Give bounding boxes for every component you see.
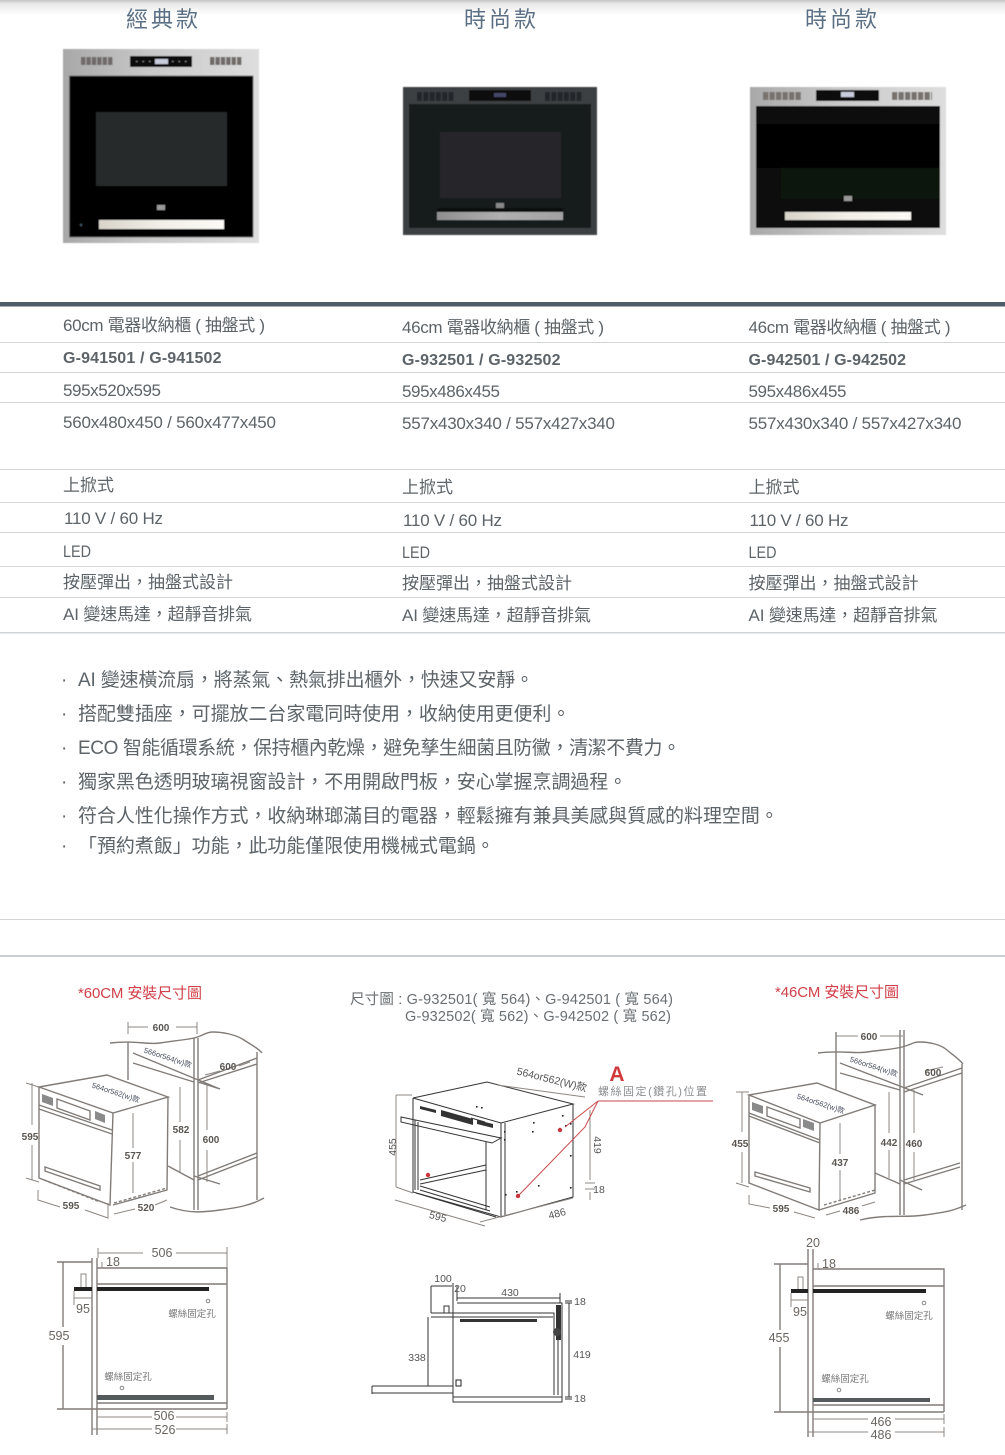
dimension labels: 486 <box>871 1428 891 1442</box>
spec table column: 60cm classic: AI 變速馬達，超靜音排氣 <box>63 605 252 624</box>
dimension labels: 577 <box>125 1151 142 1162</box>
dimension labels: 595 <box>63 1201 80 1212</box>
feature bullet list: · <box>61 806 67 827</box>
dimension labels: 595 <box>22 1132 39 1143</box>
spec table column: 46cm dark: 上掀式 <box>402 478 453 497</box>
dimension labels: 18 <box>574 1393 586 1405</box>
dimension labels: 18 <box>106 1255 120 1269</box>
spec table column: 46cm steel: 按壓彈出，抽盤式設計 <box>748 574 918 593</box>
dimension labels: 486 <box>843 1206 860 1217</box>
dimension labels: 螺絲固定孔 <box>104 1371 152 1383</box>
dimension labels <box>769 1236 933 1442</box>
dimension labels: 437 <box>832 1158 849 1169</box>
spec table column: 46cm dark: 557x430x340 / 557x427x340 <box>402 414 615 433</box>
spec table column: 46cm steel: 46cm 電器收納櫃 ( 抽盤式 ) <box>748 318 950 337</box>
dimension labels: 20 <box>806 1236 820 1250</box>
dimension labels: 526 <box>155 1423 175 1437</box>
heading: central dimension note <box>350 990 673 1025</box>
heading: central dimension note: G-932502( 寬 562)、G-942502 ( 寬 562) <box>405 1007 671 1025</box>
feature bullet list: ECO 智能循環系統，保持櫃內乾燥，避免孳生細菌且防黴，清潔不費力。 <box>78 737 681 759</box>
red callout lines <box>426 1101 713 1198</box>
dimension labels: 506 <box>154 1409 174 1423</box>
spec table column: 46cm steel: 110 V / 60 Hz <box>750 511 848 530</box>
spec table column: 60cm classic <box>63 316 276 624</box>
dimension labels: 564or562(w)款 <box>91 1080 142 1105</box>
dimension labels: 600 <box>220 1062 237 1073</box>
dimension labels: 95 <box>793 1305 807 1319</box>
dimension labels: 18 <box>593 1184 605 1196</box>
isometric install diagram: 60cm <box>22 1022 264 1218</box>
dimension labels: 595 <box>773 1204 790 1215</box>
feature bullet list: · <box>61 772 67 793</box>
dimension labels <box>49 1246 216 1437</box>
dimension labels <box>732 1032 942 1217</box>
spec table column: 46cm steel: AI 變速馬達，超靜音排氣 <box>748 606 938 625</box>
dimension labels: 100 <box>434 1273 452 1285</box>
feature bullet list: 搭配雙插座，可擺放二台家電同時使用，收納使用更便利。 <box>78 703 570 725</box>
product photo: 46cm dark unit <box>403 87 597 235</box>
side elevation diagram: 46cm <box>769 1236 944 1442</box>
spec table column: 46cm dark: AI 變速馬達，超靜音排氣 <box>402 606 591 625</box>
spec table column: 46cm dark: 595x486x455 <box>402 382 500 401</box>
feature bullet list: 「預約煮飯」功能，此功能僅限使用機械式電鍋。 <box>78 835 495 857</box>
dimension labels: 600 <box>861 1032 878 1043</box>
dimension labels: 338 <box>408 1352 426 1364</box>
spec table column: 60cm classic: 60cm 電器收納櫃 ( 抽盤式 ) <box>63 316 265 335</box>
dimension labels: 600 <box>203 1135 220 1146</box>
heading: central dimension note: 尺寸圖 : G-932501( 寬 564)、G-942501 ( 寬 564) <box>350 990 673 1008</box>
dimension labels: 430 <box>501 1287 519 1299</box>
dimension labels: 455 <box>387 1138 399 1156</box>
dimension labels: 20 <box>454 1283 466 1295</box>
heading: 60cm install diagram: *60CM 安裝尺寸圖 <box>78 985 202 1002</box>
dimension labels: 600 <box>153 1023 170 1034</box>
dimension labels: 419 <box>573 1349 591 1361</box>
feature bullet list: 獨家黑色透明玻璃視窗設計，不用開啟門板，安心掌握烹調過程。 <box>78 771 627 793</box>
dimension labels: 595 <box>49 1329 69 1343</box>
spec table column: 46cm dark: LED <box>402 543 430 562</box>
dimension labels: 566or564(w)款 <box>849 1054 900 1079</box>
dimension labels <box>387 1065 605 1225</box>
heading: classic style: 經典款 <box>126 7 201 32</box>
spec table column: 46cm steel: 上掀式 <box>748 478 800 497</box>
dimension labels: 564or562(W)款 <box>515 1065 589 1095</box>
isometric cabinet diagram: central with screw positions <box>387 1063 713 1226</box>
spec table column: 46cm dark: 按壓彈出，抽盤式設計 <box>402 574 572 593</box>
spec table column: 46cm steel: 557x430x340 / 557x427x340 <box>748 414 962 433</box>
side elevation diagram: central <box>372 1273 591 1405</box>
dimension labels: 419 <box>591 1136 603 1154</box>
spec table column: 60cm classic: 595x520x595 <box>63 381 161 400</box>
heading: 46cm install diagram: *46CM 安裝尺寸圖 <box>775 984 899 1001</box>
oven body <box>39 1075 168 1205</box>
feature bullet list <box>61 669 779 857</box>
heading: modern style column 2: 時尚款 <box>464 7 539 32</box>
spec table column: 46cm dark <box>402 318 615 625</box>
callout text: 螺絲固定(鑽孔)位置 <box>598 1084 707 1098</box>
dimension labels: 582 <box>173 1125 190 1136</box>
dimension labels: 486 <box>547 1206 567 1222</box>
spec table column: 46cm steel: LED <box>748 543 776 562</box>
feature bullet list: · <box>61 738 67 759</box>
dimension labels: 564or562(w)款 <box>796 1091 847 1116</box>
dimension labels: 442 <box>881 1138 898 1149</box>
spec table column: 60cm classic: G-941501 / G-941502 <box>63 350 222 367</box>
spec table column: 46cm steel: 595x486x455 <box>748 382 846 401</box>
dimension labels: 506 <box>152 1246 172 1260</box>
dimension labels <box>408 1273 591 1405</box>
dimension labels: 18 <box>574 1296 586 1308</box>
dimension labels: 螺絲固定孔 <box>821 1373 869 1385</box>
oven body <box>749 1083 875 1210</box>
spec table column: 46cm steel <box>748 318 962 625</box>
dimension labels: 螺絲固定孔 <box>168 1308 216 1320</box>
feature bullet list: 符合人性化操作方式，收納琳瑯滿目的電器，輕鬆擁有兼具美感與質感的料理空間。 <box>78 805 779 827</box>
dimension labels: 460 <box>906 1139 923 1150</box>
dimension labels: 95 <box>76 1302 90 1316</box>
feature bullet list: · <box>61 836 67 857</box>
dimension labels: 螺絲固定孔 <box>885 1310 933 1322</box>
dimension labels: 18 <box>822 1257 836 1271</box>
spec table column: 60cm classic: 上掀式 <box>63 476 114 495</box>
feature bullet list: AI 變速橫流扇，將蒸氣、熱氣排出櫃外，快速又安靜。 <box>78 669 534 691</box>
dimension labels: 600 <box>925 1068 942 1079</box>
dimension labels: 566or564(w)款 <box>143 1045 194 1070</box>
spec table column: 60cm classic: LED <box>63 542 91 561</box>
product photo: 46cm steel unit <box>750 87 946 235</box>
spec table column: 60cm classic: 560x480x450 / 560x477x450 <box>63 413 276 432</box>
dimension labels: 595 <box>428 1209 448 1225</box>
feature bullet list: · <box>61 704 67 725</box>
spec table column: 46cm dark: G-932501 / G-932502 <box>402 352 561 369</box>
heading: modern style column 3: 時尚款 <box>805 7 880 32</box>
dimension labels <box>22 1023 237 1214</box>
dimension labels: 455 <box>732 1139 749 1150</box>
dimension labels: 455 <box>769 1331 789 1345</box>
side elevation diagram: 60cm <box>49 1246 227 1437</box>
isometric install diagram: 46cm <box>732 1030 966 1220</box>
spec table column: 60cm classic: 按壓彈出，抽盤式設計 <box>63 573 233 592</box>
spec table column: 46cm dark: 46cm 電器收納櫃 ( 抽盤式 ) <box>402 318 604 337</box>
spec table column: 46cm steel: G-942501 / G-942502 <box>748 352 906 369</box>
spec table column: 60cm classic: 110 V / 60 Hz <box>64 509 163 528</box>
product photo: 60cm classic unit <box>63 49 259 243</box>
table rule: thick header <box>0 302 1005 306</box>
feature bullet list: · <box>61 670 67 691</box>
callout A: A <box>609 1063 625 1086</box>
spec table column: 46cm dark: 110 V / 60 Hz <box>403 511 502 530</box>
dimension labels: 520 <box>138 1203 155 1214</box>
dimension labels: 466 <box>871 1415 891 1429</box>
